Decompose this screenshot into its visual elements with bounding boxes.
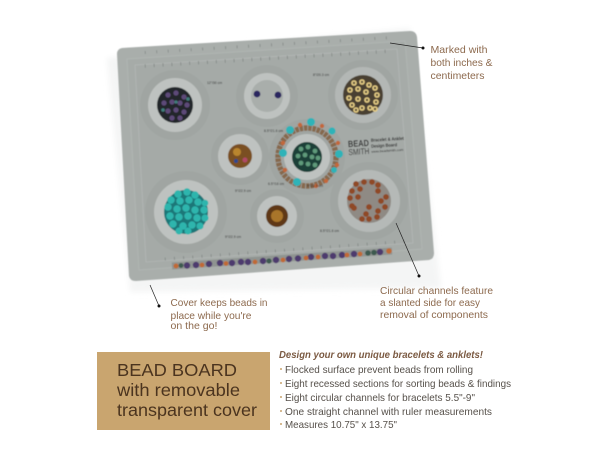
BeadSmith logo	[348, 136, 405, 157]
leader: cover	[150, 285, 160, 308]
size labels: 8"/20.3 cm	[313, 73, 329, 77]
rulers	[145, 38, 410, 259]
straight channel beads	[172, 248, 392, 269]
callout: cover: Cover keeps beads in	[170, 297, 268, 309]
feature list: Eight recessed sections for sorting beads & findings	[285, 378, 511, 390]
compartment 3: gold rings	[328, 60, 398, 130]
callout: channels	[380, 285, 493, 321]
size labels: 8.5"/21.6 cm	[264, 129, 283, 133]
compartment 8: copper beads	[330, 162, 408, 240]
title panel: transparent cover	[117, 400, 257, 420]
title panel	[97, 352, 270, 430]
compartment 4: bronze beads	[211, 127, 269, 185]
title panel: BEAD BOARD	[117, 360, 237, 380]
size labels: 9"/22.9 cm	[235, 189, 251, 193]
leader: channels	[396, 223, 420, 278]
size labels	[207, 73, 339, 239]
callout: marked: Marked with	[430, 44, 488, 56]
bead board	[117, 31, 434, 281]
callout: marked: centimeters	[430, 70, 484, 82]
compartment 7: bronze beads	[250, 189, 304, 243]
callout: marked	[430, 44, 492, 82]
BeadSmith logo: SMITH	[348, 146, 370, 157]
size labels: 12"/30 cm	[207, 81, 222, 85]
callout: marked: both inches &	[430, 57, 492, 69]
BeadSmith logo: BEAD	[348, 138, 370, 149]
callout: channels: a slanted side for easy	[380, 297, 481, 309]
callout: cover: place while you're	[170, 310, 252, 322]
leader: marked	[390, 43, 424, 50]
callout: channels: Circular channels feature	[380, 285, 493, 297]
size labels: 8.5"/21.6 cm	[320, 229, 339, 233]
size labels: 9"/22.9 cm	[225, 235, 241, 239]
feature list: Flocked surface prevent beads from rolling	[285, 364, 473, 376]
size labels: 9"/22.9 cm	[307, 184, 323, 188]
feature list: Eight circular channels for bracelets 5.5"-9"	[285, 392, 475, 404]
BeadSmith logo: Bracelet & Anklet	[371, 136, 404, 143]
feature list: One straight channel with ruler measurements	[285, 406, 492, 418]
title panel: with removable	[116, 380, 240, 400]
feature list: Measures 10.75" x 13.75"	[285, 419, 397, 431]
BeadSmith logo: Design Board	[371, 142, 397, 149]
compartment 1: purple beads	[140, 70, 210, 140]
callout: cover: on the go!	[170, 320, 218, 332]
callout: channels: removal of components	[380, 309, 488, 321]
list heading: Design your own unique bracelets & anklets!	[279, 349, 483, 361]
BeadSmith logo: www.beadsmith.com	[371, 148, 404, 154]
transparent cover shadow	[107, 28, 441, 292]
compartment 6: turquoise beads	[145, 171, 227, 253]
bracelet channel with green beads	[269, 118, 345, 195]
feature list	[279, 349, 511, 431]
callout: cover	[170, 297, 268, 332]
size labels: 6.5"/16 cm	[268, 182, 284, 186]
compartment 2: two beads	[236, 65, 298, 127]
